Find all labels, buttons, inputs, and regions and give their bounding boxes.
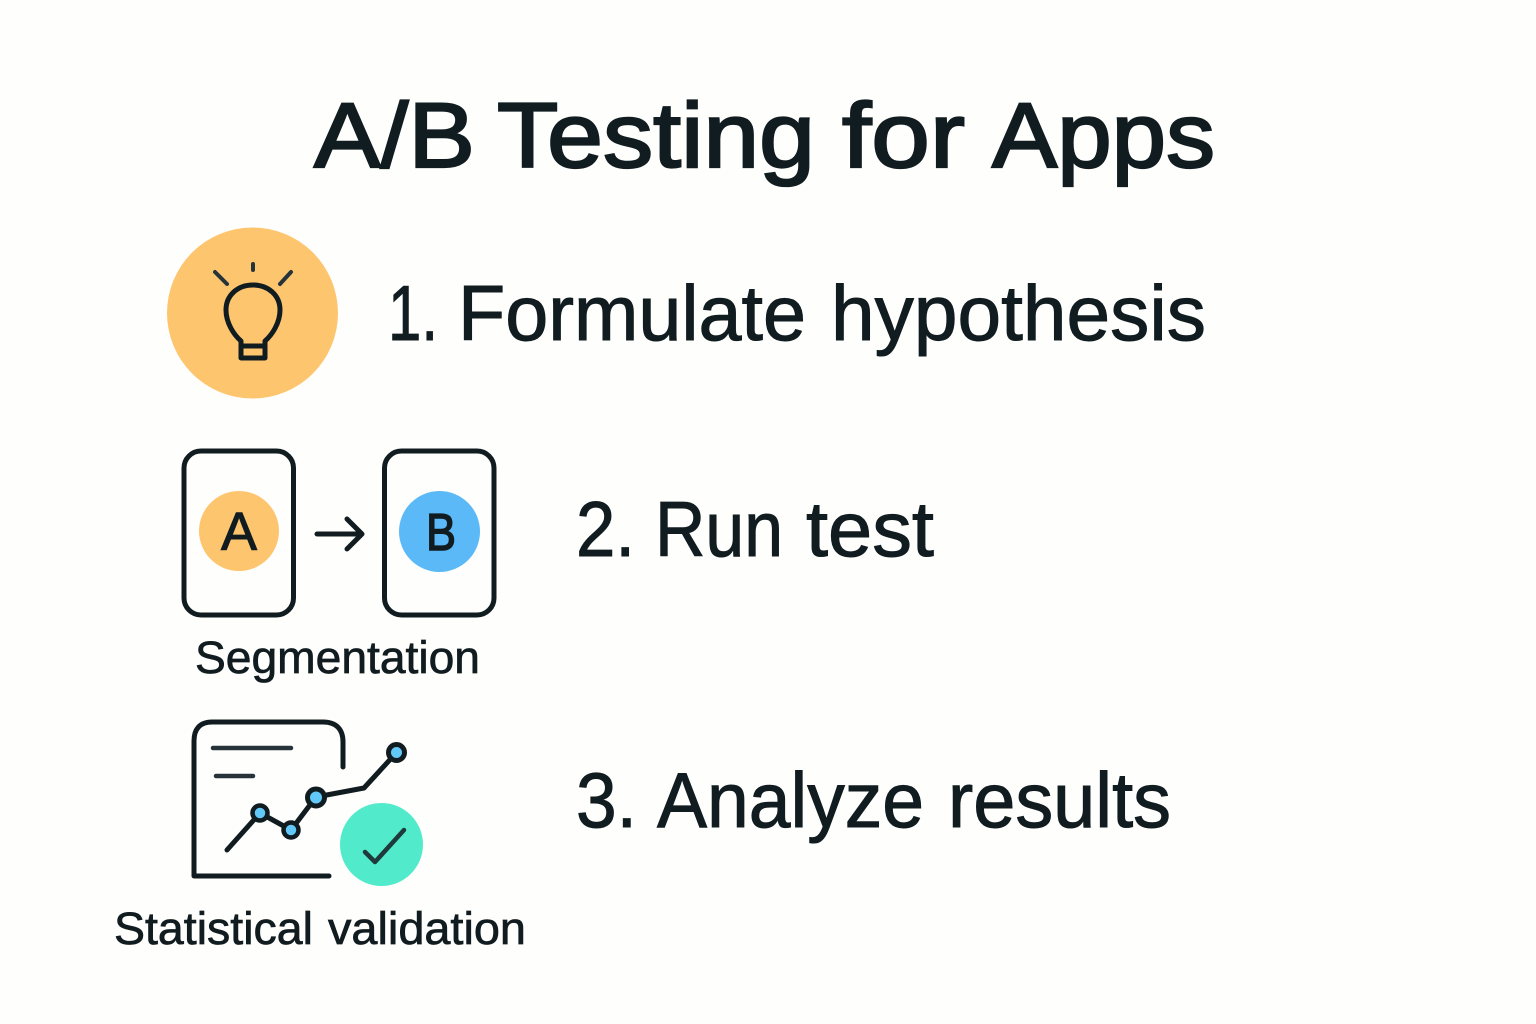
phone B <box>384 451 494 615</box>
step 2 label: test <box>806 485 934 573</box>
title: Testing <box>497 85 815 187</box>
step 3 label: 3. <box>576 756 637 844</box>
title: A/B <box>314 85 475 187</box>
arrow <box>317 519 362 549</box>
step 1 label: hypothesis <box>831 269 1206 357</box>
step 2 label: Run <box>655 485 783 573</box>
statistical validation caption: validation <box>328 903 526 954</box>
icon: A/B phones <box>184 451 494 615</box>
document text lines <box>213 748 291 776</box>
title: Apps <box>992 85 1215 187</box>
statistical validation caption: Statistical <box>114 903 313 954</box>
line chart <box>227 744 404 850</box>
title <box>314 85 1215 187</box>
check badge <box>340 803 423 886</box>
step 1 label: 1. <box>388 269 438 357</box>
step 3 label: Analyze <box>657 756 924 844</box>
statistical validation caption <box>114 903 526 954</box>
phone A: A <box>221 502 257 562</box>
step 3 label: results <box>948 756 1171 844</box>
step 2 label: 2. <box>576 485 635 573</box>
phone B: B <box>426 504 456 562</box>
step 1 label: Formulate <box>458 269 806 357</box>
step 2 label <box>576 485 934 573</box>
segmentation caption: Segmentation <box>195 632 480 683</box>
step 3 label <box>576 756 1171 844</box>
icon: chart with check <box>194 722 423 886</box>
step 1 label <box>388 269 1206 357</box>
icon: lightbulb <box>167 228 338 398</box>
phone A <box>184 451 294 615</box>
title: for <box>842 85 965 187</box>
document outline <box>194 722 343 876</box>
